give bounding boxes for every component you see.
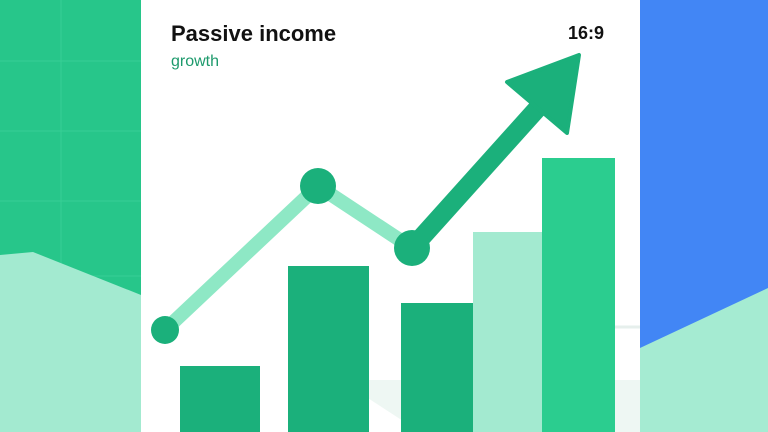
panel: right blue background — [640, 0, 768, 432]
panel: left green background — [0, 0, 141, 432]
subtitle: growth — [171, 53, 219, 70]
panel: light area behind bars — [340, 380, 640, 432]
aspect label: 16:9 — [568, 23, 604, 43]
line chart — [151, 168, 412, 344]
title: Passive income — [171, 21, 336, 46]
bar chart — [180, 158, 615, 432]
arrow: growth — [394, 55, 579, 266]
